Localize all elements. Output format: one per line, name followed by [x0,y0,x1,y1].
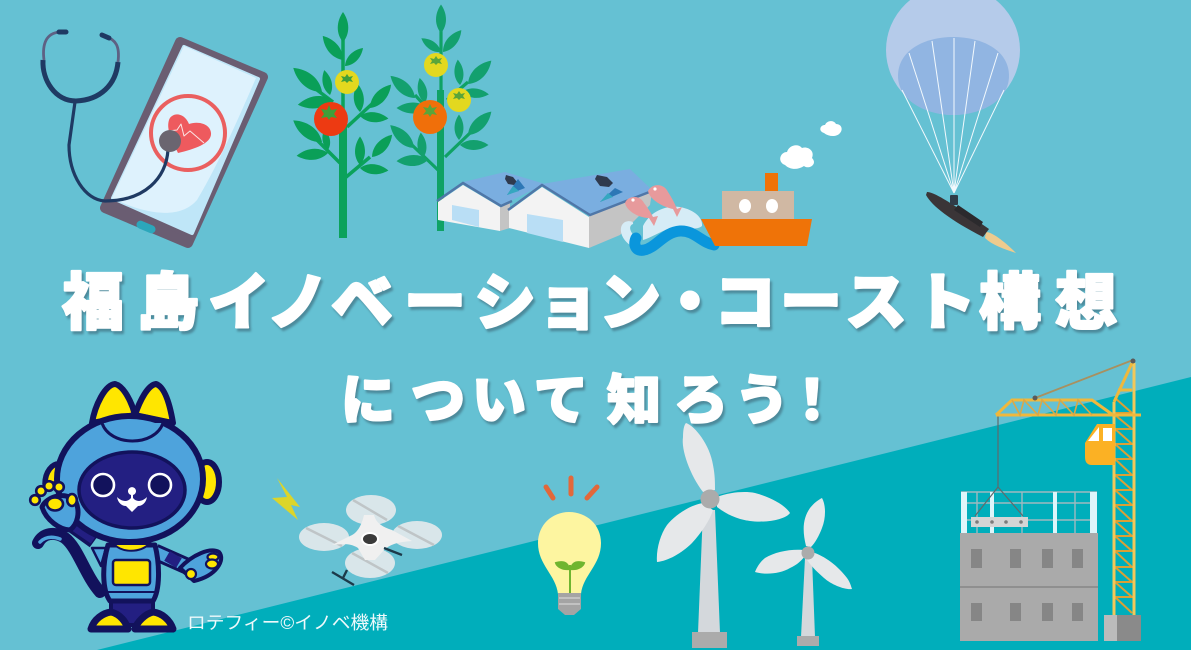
fish [625,185,682,226]
body belt line [108,591,156,593]
right factory door [527,214,563,242]
helmet [57,416,203,542]
screw base [558,593,581,615]
icon: fish jumping from wave [621,185,714,250]
icon: balloon carrying rocket [886,0,1020,253]
body [104,545,159,601]
cabin [722,191,794,219]
chest panel [113,560,150,585]
panel bolts [975,520,1023,524]
tether lines [902,38,1004,193]
sprout [556,562,584,593]
fin [954,205,983,227]
balloon inner [898,37,1009,115]
right foot [135,612,173,629]
building block [960,533,1098,641]
blades [657,423,790,562]
windows [971,549,1083,621]
icon: drone [299,495,442,585]
crane foot [1104,615,1118,641]
tower base [692,632,727,648]
icon: tomato plant right [386,4,495,231]
icon: lightning bolt [272,478,300,520]
tower [801,558,815,637]
landing skid [332,548,402,585]
leaves [289,12,396,175]
payload connector [950,195,958,205]
calyxes [423,56,465,117]
right factory roof edge [508,185,652,215]
lifted panel [971,517,1028,527]
roof emblems [505,175,623,202]
title [62,269,1117,431]
arm band [167,556,179,563]
waving arm inner [72,524,94,539]
chest piece [159,130,181,152]
crane cable [1035,360,1133,398]
left ear [92,384,135,423]
phone body [105,42,263,243]
tower base [797,636,819,646]
left foot [91,612,128,629]
background: teal diagonal band [97,377,1191,650]
wave foam [643,207,702,240]
icon: small wind turbine [755,498,852,646]
legs [111,597,153,625]
left factory roof [463,172,545,206]
scaffold rails [961,492,1097,533]
icon: processing factories [437,169,652,248]
jib [996,400,1141,415]
hub [700,490,720,508]
balloon envelope [886,0,1020,115]
mouth [117,487,147,512]
icon: smartphone with stethoscope [43,32,263,243]
right hand [180,550,221,581]
ear tips [59,32,109,38]
right factory front [509,187,589,248]
icon: large wind turbine [657,423,790,648]
blades [755,498,852,589]
chimney [765,173,778,191]
blue wave [635,231,714,250]
lattice braces [1115,398,1132,613]
face [79,452,185,528]
yellow tomatoes [424,53,471,112]
screen highlight [112,46,256,213]
bulb glass [538,512,601,594]
hull [701,219,812,246]
camera [362,533,378,545]
helmet crest [102,423,163,441]
stethoscope headset [43,60,118,101]
title line 2: について知ろう！ [341,371,839,431]
white columns [961,492,1097,533]
credit caption: ロテフィー©イノベ機構 [187,613,388,633]
heart monitor symbol [151,96,225,170]
floor line [960,586,1098,588]
red tomato [314,102,348,136]
cab windows [1088,427,1112,441]
portholes [739,199,778,213]
eyes [92,474,171,496]
leaves [386,4,495,167]
operator cab [1085,424,1115,465]
waving paw [42,496,78,530]
left factory door [452,205,479,227]
stethoscope tube [69,102,168,201]
ear tubes [44,32,118,62]
left factory front [438,185,500,231]
left ear muff [45,464,70,484]
orange tomato [413,100,447,134]
thread lines [559,598,580,604]
hub [802,546,814,560]
smoke cloud large [780,145,814,169]
stem and branches [412,12,470,231]
hoist cable [975,416,1023,516]
mast [1114,363,1132,402]
drone body [332,515,412,560]
fish eyes [631,187,657,202]
hand pads [186,554,218,579]
icon: light bulb with sprout [538,478,601,615]
rotor blades [306,500,434,573]
left factory side wall [500,201,510,231]
rocket [926,192,989,237]
right ear muff [195,462,219,502]
shoulder left [92,548,106,566]
left factory roof edge [437,183,512,206]
wave curl [621,221,636,245]
rotors [299,495,442,578]
tower [698,510,720,633]
mascot: Rotefy robot cat [30,384,221,629]
right ear [135,384,173,423]
collar [114,544,149,551]
smoke cloud small [820,121,842,136]
paw pads [30,481,77,510]
tail inner [40,537,60,542]
right arm [155,552,198,571]
icon: tower crane [996,358,1141,641]
stem and branches [317,20,373,238]
rays [546,478,597,498]
icon: tomato plant left [289,12,396,238]
yellow tomato [335,70,359,94]
right factory roof [542,169,652,215]
calyxes [321,74,353,120]
flame [985,232,1016,253]
waving arm [70,522,95,540]
title line 1: 福島イノベーション・コースト構想 [62,269,1117,338]
phone screen [113,47,258,233]
icon: fishing boat [701,121,842,246]
pulley dots [1032,358,1136,400]
home button [135,219,157,235]
icon: building under construction [960,416,1098,641]
right factory side wall [589,192,652,248]
tail [38,534,100,592]
tower legs [1114,363,1134,615]
